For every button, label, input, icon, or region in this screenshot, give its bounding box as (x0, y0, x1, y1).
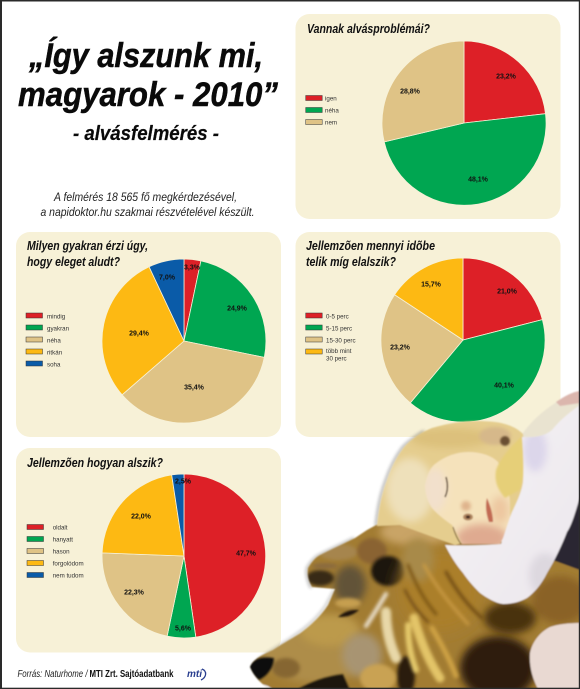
title (18, 37, 278, 114)
child hair (376, 420, 524, 546)
legend: feeling rested (26, 313, 70, 368)
legend: sleeping position (27, 524, 84, 580)
pie chart: sleep problems (382, 41, 546, 205)
pie chart: feeling rested: 35,4% (184, 384, 205, 392)
pie chart: time to fall asleep: 21,0% (497, 288, 518, 296)
pie chart: sleeping position (102, 474, 266, 638)
eye (445, 477, 447, 497)
legend: sleep problems: néha (325, 108, 339, 114)
pie chart: sleeping position: 2,5% (175, 478, 192, 486)
heading: feeling rested (27, 238, 148, 269)
legend: feeling rested: soha (47, 362, 61, 368)
dark clothing (545, 490, 580, 585)
dog eye (338, 610, 359, 617)
pie chart: sleeping position: 22,3% (124, 590, 145, 596)
title: magyarok - 2010” (18, 76, 278, 114)
heading: time to fall asleep: telik míg elalszik? (306, 254, 396, 269)
legend: time to fall asleep: 5-15 perc (326, 326, 352, 332)
legend: feeling rested: mindig (47, 314, 66, 320)
lips (486, 498, 493, 522)
legend: feeling rested: gyakran (47, 326, 70, 332)
legend: time to fall asleep: 15-30 perc (326, 338, 356, 344)
pie chart: sleep problems: 28,8% (400, 88, 421, 96)
legend: sleeping position: hason (53, 548, 70, 556)
pie chart: time to fall asleep: 23,2% (390, 344, 411, 352)
legend: feeling rested: ritkán (47, 350, 63, 356)
heading: feeling rested: hogy eleget aludt? (27, 254, 120, 269)
pie chart: sleeping position: 5,6% (175, 626, 192, 632)
panel: feeling rested (16, 232, 281, 437)
legend: sleep problems: igen (325, 96, 337, 102)
legend: sleeping position: hanyatt (53, 536, 73, 544)
forehead (334, 565, 366, 605)
heading: time to fall asleep: Jellemzõen mennyi idõbe (306, 238, 435, 253)
child sleeve (440, 400, 580, 610)
pie chart: time to fall asleep: 40,1% (494, 382, 515, 390)
pie chart: feeling rested (102, 259, 266, 423)
title: „Így alszunk mi, (28, 37, 263, 75)
legend: sleeping position: nem tudom (53, 572, 84, 580)
icon: mti logo: mti (187, 669, 202, 680)
dog (245, 515, 580, 689)
nose (461, 501, 471, 511)
pie chart: time to fall asleep: 15,7% (421, 282, 442, 288)
pie chart: feeling rested: 7,0% (159, 274, 176, 282)
survey description: a napidoktor.hu szakmai részvételével készült. (40, 205, 254, 219)
child shoulder (521, 392, 580, 445)
panel: time to fall asleep (296, 232, 560, 437)
fur streaks (366, 565, 482, 678)
pie chart: sleeping position: 47,7% (236, 550, 257, 558)
heading: sleep problems: Vannak alvásproblémái? (307, 21, 430, 36)
child knee (530, 623, 580, 689)
source line: MTI Zrt. Sajtóadatbank (90, 669, 174, 680)
heading: sleeping position: Jellemzõen hogyan alszik? (27, 455, 163, 470)
survey description: A felmérés 18 565 fő megkérdezésével, (53, 190, 237, 204)
pie chart: sleeping position: 22,0% (131, 514, 152, 520)
legend: time to fall asleep: 0-5 perc (326, 314, 349, 320)
photo: sleeping child hugging a collie (245, 391, 580, 689)
cheek line (453, 527, 461, 544)
source line: Forrás: Naturhome / (18, 669, 88, 680)
subtitle: - alvásfelmérés - (73, 123, 219, 145)
legend: sleeping position: oldalt (53, 524, 68, 532)
dog mouth (298, 674, 350, 689)
legend: time to fall asleep (306, 313, 356, 362)
legend: feeling rested: néha (47, 338, 61, 344)
panel: sleep problems (296, 14, 560, 219)
legend: sleeping position: forgolódom (53, 560, 84, 568)
pie chart: feeling rested: 29,4% (129, 330, 150, 338)
heading: feeling rested: Milyen gyakran érzi úgy, (27, 238, 148, 253)
ear interior (371, 556, 405, 586)
heading: time to fall asleep (306, 238, 435, 269)
legend: sleep problems (306, 96, 339, 126)
dark lower fur (460, 636, 536, 689)
pie chart: sleep problems: 48,1% (468, 176, 489, 184)
legend: time to fall asleep: 30 perc (326, 356, 347, 362)
dog nose (249, 657, 274, 680)
blond strands (495, 436, 525, 498)
child face (425, 451, 510, 545)
pie chart: sleep problems: 23,2% (496, 74, 517, 80)
nostril (463, 514, 473, 520)
right body (532, 576, 580, 624)
legend: sleep problems: nem (325, 120, 337, 126)
left ear (318, 544, 358, 560)
legend: time to fall asleep: több mint (326, 348, 352, 355)
right ear (357, 538, 387, 564)
mane (398, 548, 482, 632)
photo shadow (258, 431, 424, 660)
pie chart: feeling rested: 24,9% (227, 306, 248, 312)
survey description (40, 190, 254, 219)
head top (376, 524, 448, 548)
pie chart: time to fall asleep (381, 258, 545, 422)
source line (18, 669, 174, 680)
panel: sleeping position (16, 448, 281, 652)
pie chart: feeling rested: 3,3% (184, 264, 201, 272)
dog face tones (262, 633, 352, 686)
